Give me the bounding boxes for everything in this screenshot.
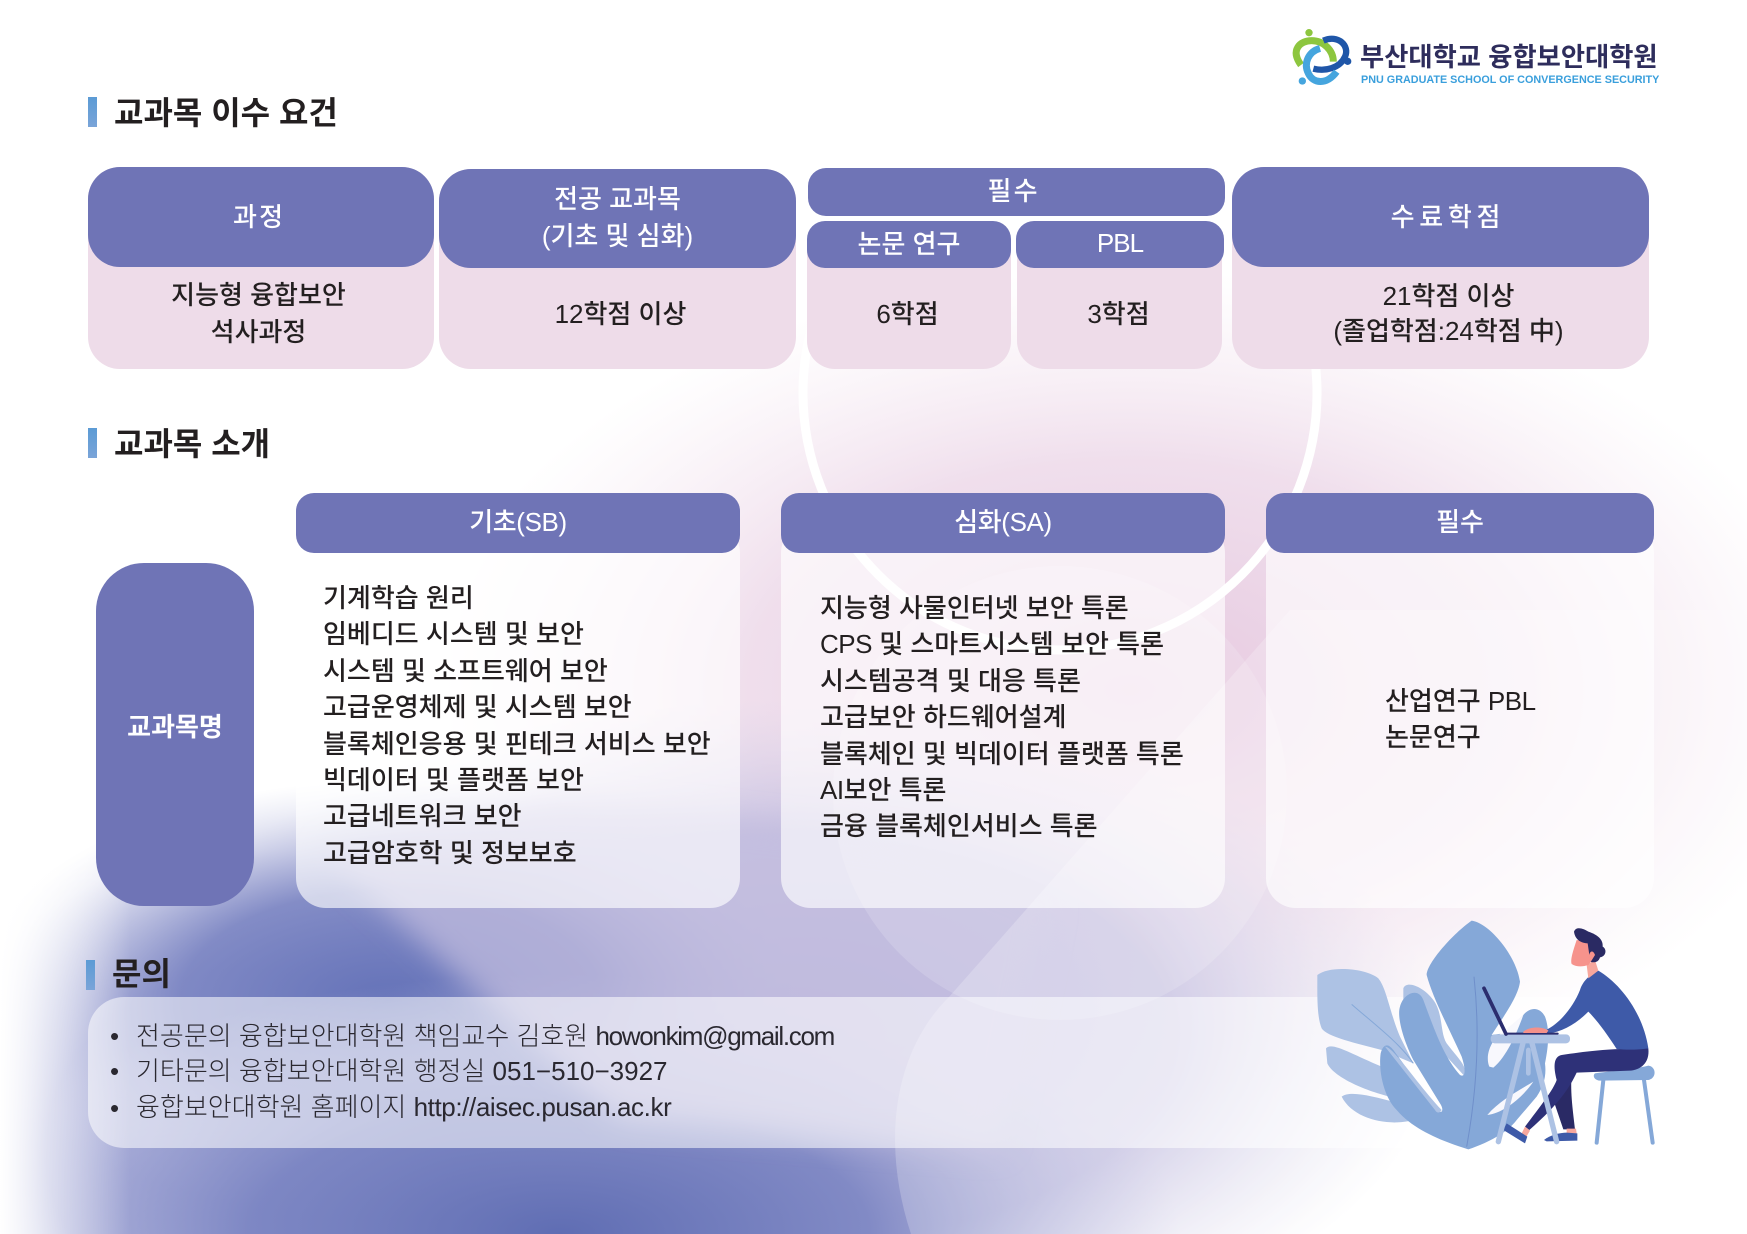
list: required courses [1385, 686, 1536, 752]
text: contact lines: 전공문의 융합보안대학원 책임교수 김호원 howonkim@gmail.com [136, 1021, 834, 1051]
icon: table and laptop [1484, 988, 1570, 1142]
list: advanced courses: CPS 및 스마트시스템 보안 특론 [820, 629, 1164, 659]
panel: advanced courses [781, 493, 1225, 908]
heading: inquiries [86, 956, 171, 992]
illustration: person with laptop and leaves [1317, 920, 1655, 1150]
list: advanced courses: 금융 블록체인서비스 특론 [820, 811, 1098, 841]
panel: completion credits column [1232, 167, 1649, 369]
header: thesis research: 논문 연구 [858, 229, 960, 259]
header: completion credits: 수 료 학 점 [1391, 202, 1500, 232]
panel: basic courses [296, 493, 740, 908]
panel: course column: 석사과정 [211, 317, 306, 347]
header: advanced: 심화(SA) [954, 507, 1052, 537]
text: completion credits: 21학점 이상 [1383, 281, 1514, 311]
text: contact lines: • [110, 1056, 119, 1086]
icon: person [1503, 928, 1649, 1143]
list: advanced courses: 블록체인 및 빅데이터 플랫폼 특론 [820, 739, 1184, 769]
list: basic courses [323, 583, 711, 868]
list: basic courses: 블록체인응용 및 핀테크 서비스 보안 [323, 729, 711, 759]
panel: required courses [1266, 493, 1654, 908]
list: advanced courses: 고급보안 하드웨어설계 [820, 702, 1066, 732]
list: required courses: 산업연구 PBL [1385, 686, 1536, 716]
header: PBL: PBL [1097, 228, 1143, 258]
header: required: 필수 [1436, 507, 1484, 537]
header: completion credits [1232, 167, 1649, 267]
header: advanced [781, 493, 1225, 553]
header: required [808, 168, 1225, 216]
card body [296, 523, 740, 908]
header: course [88, 167, 434, 267]
text: contact lines: • [110, 1021, 119, 1051]
list: basic courses: 임베디드 시스템 및 보안 [323, 619, 584, 649]
text: contact lines [110, 1021, 834, 1123]
panel: contact [88, 997, 1658, 1148]
header: required [1266, 493, 1654, 553]
label: course names [96, 563, 254, 906]
icon: stool [1594, 1066, 1655, 1143]
list: advanced courses [820, 593, 1184, 841]
header: basic: 기초(SB) [469, 507, 567, 537]
header: PBL [1016, 221, 1224, 268]
header: basic [296, 493, 740, 553]
list: basic courses: 고급운영체제 및 시스템 보안 [323, 692, 632, 722]
label: course names: 교과목명 [127, 712, 223, 742]
list: required courses: 논문연구 [1385, 722, 1481, 752]
panel: major credits column [439, 169, 796, 369]
list: advanced courses: 지능형 사물인터넷 보안 특론 [820, 593, 1129, 623]
list: basic courses: 고급네트워크 보안 [323, 801, 522, 831]
header: required: 필 수 [987, 176, 1038, 206]
list: advanced courses: AI보안 특론 [820, 775, 946, 805]
heading: course introduction: 교과목 소개 [114, 426, 270, 462]
list: basic courses: 빅데이터 및 플랫폼 보안 [323, 765, 584, 795]
header: major courses: (기초 및 심화) [542, 221, 693, 251]
panel: PBL column [1017, 221, 1222, 369]
text: contact lines: 기타문의 융합보안대학원 행정실 051−510−3927 [136, 1056, 668, 1086]
list: basic courses: 시스템 및 소프트웨어 보안 [323, 656, 608, 686]
header: course: 과 정 [233, 202, 283, 232]
icon: university emblem [1292, 29, 1352, 85]
text: contact lines: 융합보안대학원 홈페이지 http://aisec.pusan.ac.kr [136, 1092, 671, 1122]
text: major credits: 12학점 이상 [555, 299, 686, 329]
panel: completion credits column: (졸업학점:24학점 中) [1333, 316, 1564, 346]
panel: thesis column [807, 221, 1011, 369]
header: thesis research [807, 221, 1011, 268]
logo korean name: 부산대학교 융합보안대학원 [1360, 42, 1658, 72]
list: basic courses: 기계학습 원리 [323, 583, 474, 613]
text: thesis credits: 6학점 [876, 299, 939, 329]
header: major courses: 전공 교과목 [554, 184, 681, 214]
header: major courses [439, 169, 796, 268]
text: PBL credits: 3학점 [1087, 299, 1150, 329]
list: basic courses: 고급암호학 및 정보보호 [323, 838, 577, 868]
text: contact lines: • [110, 1093, 119, 1123]
icon: back leaves [1317, 969, 1466, 1122]
card body [781, 523, 1225, 908]
panel: course column [88, 167, 434, 369]
card body [1266, 523, 1654, 908]
text: course name: 지능형 융합보안 [171, 280, 346, 310]
list: advanced courses: 시스템공격 및 대응 특론 [820, 666, 1081, 696]
logo [1292, 29, 1660, 86]
heading: inquiries: 문의 [112, 956, 171, 992]
heading: requirements: 교과목 이수 요건 [114, 95, 338, 131]
logo english name: PNU GRADUATE SCHOOL OF CONVERGENCE SECURITY [1361, 74, 1659, 86]
icon: main leaf [1380, 921, 1548, 1149]
